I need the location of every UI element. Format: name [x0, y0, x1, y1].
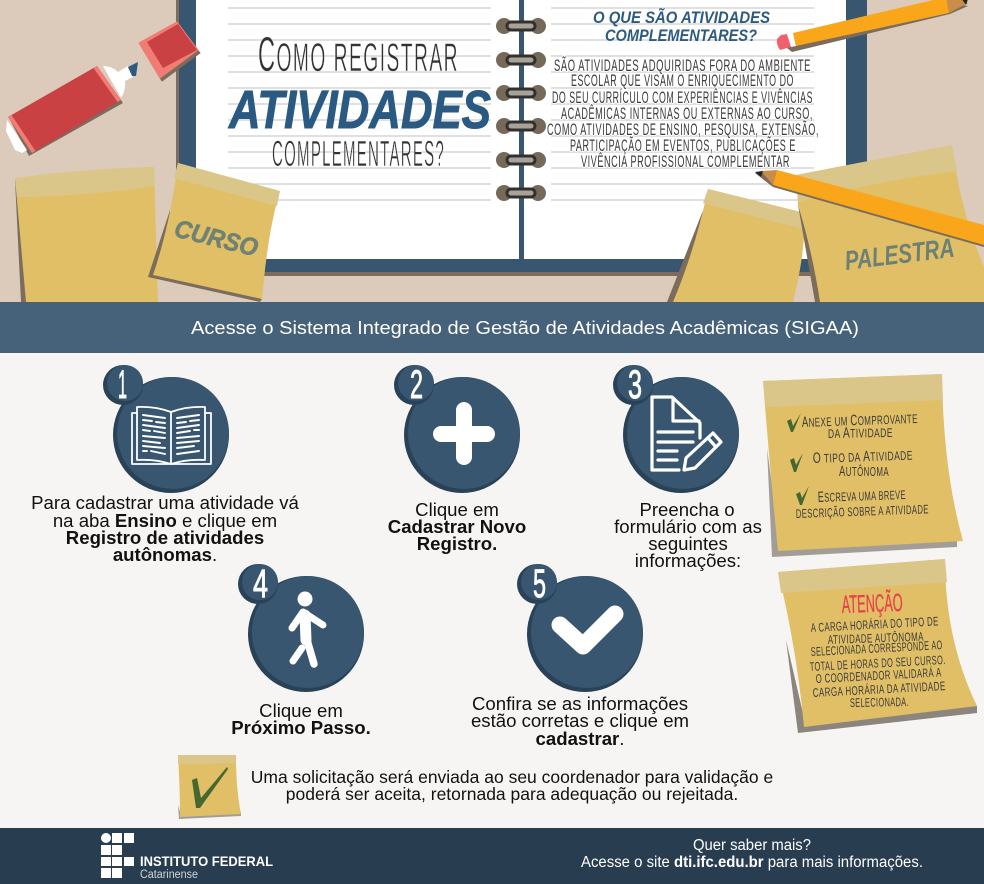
step 1 text: na aba Ensino e clique em — [53, 510, 277, 531]
icon: check mark — [560, 614, 615, 646]
main panel — [0, 353, 984, 828]
step 3 — [613, 363, 762, 571]
step 1 — [31, 363, 299, 565]
checklist text — [796, 410, 929, 521]
step 2 badge: 2 — [410, 363, 423, 407]
title — [227, 28, 491, 174]
explanation text — [547, 7, 819, 171]
final note text: poderá ser aceita, retornada para adequação ou rejeitada. — [286, 784, 738, 804]
step 1 text: Para cadastrar uma atividade vá — [31, 492, 299, 513]
step 5 text: cadastrar. — [536, 728, 624, 749]
check marks — [787, 413, 809, 505]
explanation heading: COMPLEMENTARES? — [605, 26, 758, 45]
pencil: top — [777, 0, 968, 52]
final note with check — [178, 755, 773, 819]
checklist text: ANEXE UM COMPROVANTE — [802, 410, 918, 431]
warning text — [809, 613, 946, 710]
checklist text: ESCREVA UMA BREVE — [818, 486, 906, 506]
pencil: bottom — [755, 170, 984, 247]
sticky note: left blank — [15, 167, 158, 302]
step 4 badge — [238, 562, 364, 692]
step 1 text: Registro de atividades — [66, 527, 264, 548]
logo — [101, 833, 273, 881]
sticky note: curso — [148, 163, 280, 302]
logo: Catarinense — [140, 869, 198, 881]
icon: walking person — [292, 592, 323, 664]
warning text: SELECIONADA. — [850, 695, 909, 710]
sticky note: middle right blank — [667, 189, 805, 302]
logo: INSTITUTO FEDERAL — [140, 853, 273, 869]
footer — [0, 828, 984, 884]
sticky note: checklist — [763, 374, 963, 557]
step 2 text: Registro. — [417, 533, 497, 554]
explanation body: ESCOLAR QUE VISAM O ENRIQUECIMENTO DO — [571, 72, 794, 90]
step 2 badge — [394, 363, 520, 493]
red marker — [6, 22, 200, 156]
final note text: Uma solicitação será enviada ao seu coordenador para validação e — [251, 767, 773, 787]
step 1 text — [31, 492, 299, 565]
step 2 — [388, 363, 526, 554]
step 5 text: Confira se as informações — [472, 693, 688, 714]
icon: form and pencil — [652, 397, 721, 470]
step 3 text: Preencha o — [639, 499, 735, 520]
warning heading: ATENÇÃO — [841, 588, 903, 619]
step 4 badge: 4 — [253, 562, 268, 606]
title: COMPLEMENTARES? — [272, 133, 445, 174]
icon: sticky note check — [178, 755, 241, 819]
step 5 text: estão corretas e clique em — [471, 710, 689, 731]
explanation heading: O QUE SÃO ATIVIDADES — [593, 7, 771, 27]
sticky note: warning — [778, 559, 977, 733]
step 4 text: Clique em — [259, 700, 343, 721]
explanation body: PARTICIPAÇÃO EM EVENTOS, PUBLICAÇÕES E — [570, 135, 796, 155]
step 5 — [471, 562, 689, 749]
icon: plus — [441, 410, 487, 457]
step 2 text — [388, 499, 526, 554]
checklist text: O TIPO DA ATIVIDADE — [813, 447, 913, 467]
footer text: Acesse o site dti.ifc.edu.br para mais informações. — [581, 854, 923, 871]
sticky note: palestra — [796, 145, 984, 302]
step 3 text: informações: — [635, 550, 741, 571]
banner text: Acesse o Sistema Integrado de Gestão de Atividades Acadêmicas (SIGAA) — [191, 318, 859, 338]
step 4 text: Próximo Passo. — [231, 717, 371, 738]
step 1 badge: 1 — [118, 363, 127, 407]
footer text — [581, 837, 923, 871]
title line 1: COMO REGISTRAR — [258, 28, 459, 82]
banner — [0, 302, 984, 353]
step 5 text — [471, 693, 689, 749]
step 2 text: Clique em — [415, 499, 499, 520]
step 3 badge: 3 — [628, 363, 642, 407]
explanation body — [547, 55, 819, 171]
checklist text: AUTÔNOMA — [839, 463, 889, 480]
step 3 text: seguintes — [648, 533, 728, 554]
step 3 text — [614, 499, 762, 571]
icon: open book — [132, 407, 211, 464]
footer text: Quer saber mais? — [693, 837, 811, 854]
step 3 text: formulário com as — [614, 516, 762, 537]
step 5 badge: 5 — [533, 562, 546, 606]
checklist text: DA ATIVIDADE — [828, 424, 893, 442]
title line 2: ATIVIDADES — [227, 80, 491, 140]
step 1 badge — [103, 363, 229, 493]
step 4 — [231, 562, 371, 738]
notebook spiral rings — [496, 18, 546, 201]
explanation body: VIVÊNCIA PROFISSIONAL COMPLEMENTAR — [581, 152, 790, 171]
final note text — [251, 767, 773, 804]
notebook — [176, 0, 867, 276]
explanation heading — [593, 7, 771, 45]
step 1 text: autônomas. — [113, 544, 217, 565]
warning text: ATIVIDADE AUTÔNOMA — [828, 629, 924, 647]
step 2 text: Cadastrar Novo — [388, 516, 526, 537]
label: curso: CURSO — [172, 215, 261, 263]
step 4 text — [231, 700, 371, 738]
step 3 badge — [613, 363, 739, 493]
desk background — [0, 0, 984, 302]
step 5 badge — [517, 562, 643, 692]
